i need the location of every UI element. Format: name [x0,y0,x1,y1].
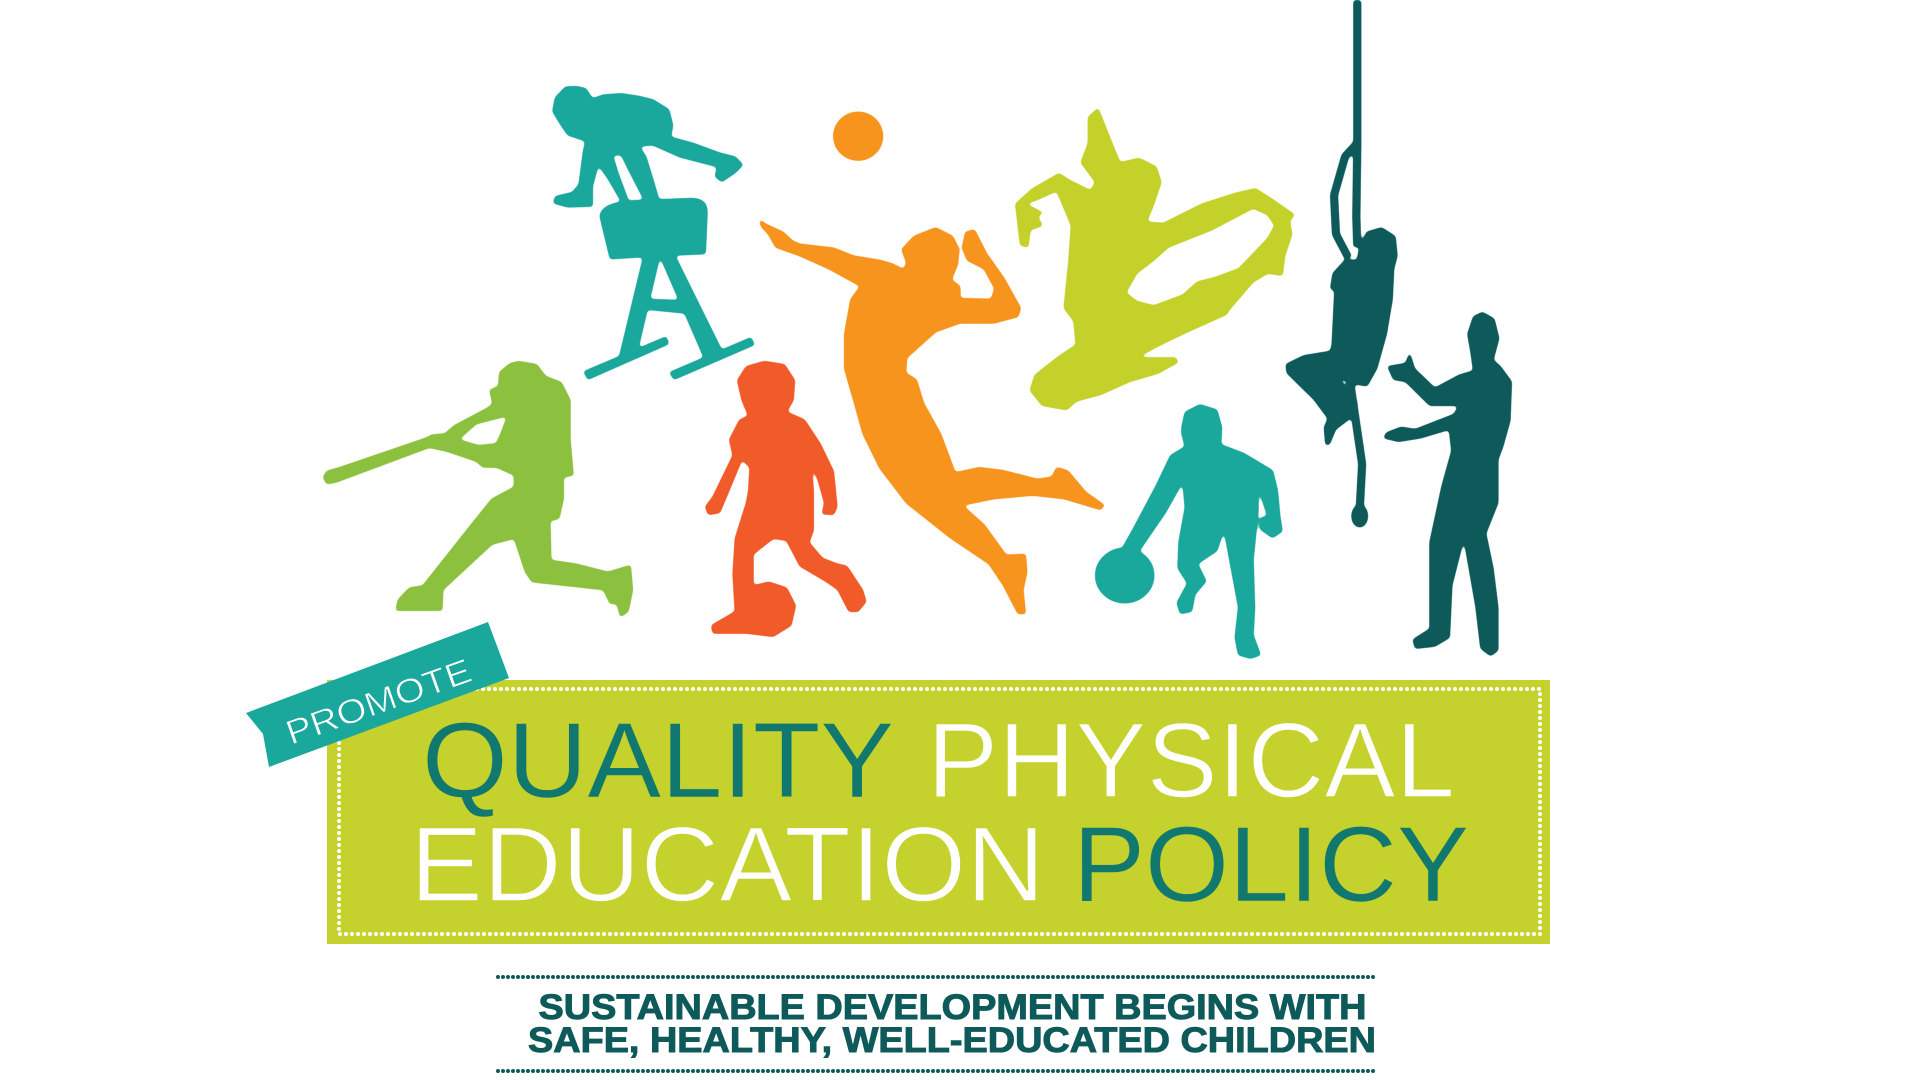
icon: batter [323,361,633,617]
panel: title banner [327,680,1550,944]
ribbon: promote: PROMOTE [281,652,477,753]
icon: volleyball [833,111,883,161]
athletes right group [760,0,1511,658]
heading: education policy: EDUCATION [410,804,1045,924]
icon: rope climber [1286,228,1397,445]
icon: leaping dancer [1016,108,1294,410]
icon: child kicking soccer ball [705,361,866,636]
icon: gymnast on vault [553,86,754,379]
icon: climbing rope [1334,0,1364,524]
heading: education policy: POLICY [1073,804,1469,924]
text: tagline line one: SUSTAINABLE DEVELOPMENT BEGINS WITH [538,988,1366,1027]
ribbon: promote [246,622,509,767]
heading: quality physical: QUALITY [422,700,894,820]
icon: teacher with raised hands [1384,312,1511,656]
heading: quality physical [422,700,1455,820]
icon: volleyball player [760,220,1104,614]
icon: child dribbling basketball [1096,405,1282,658]
tagline block [498,977,1376,1071]
text: tagline line two: SAFE, HEALTHY, WELL-EDUCATED CHILDREN [528,1021,1376,1060]
athletes left group [323,86,866,636]
heading: education policy [410,804,1469,924]
heading: quality physical: PHYSICAL [927,700,1455,820]
